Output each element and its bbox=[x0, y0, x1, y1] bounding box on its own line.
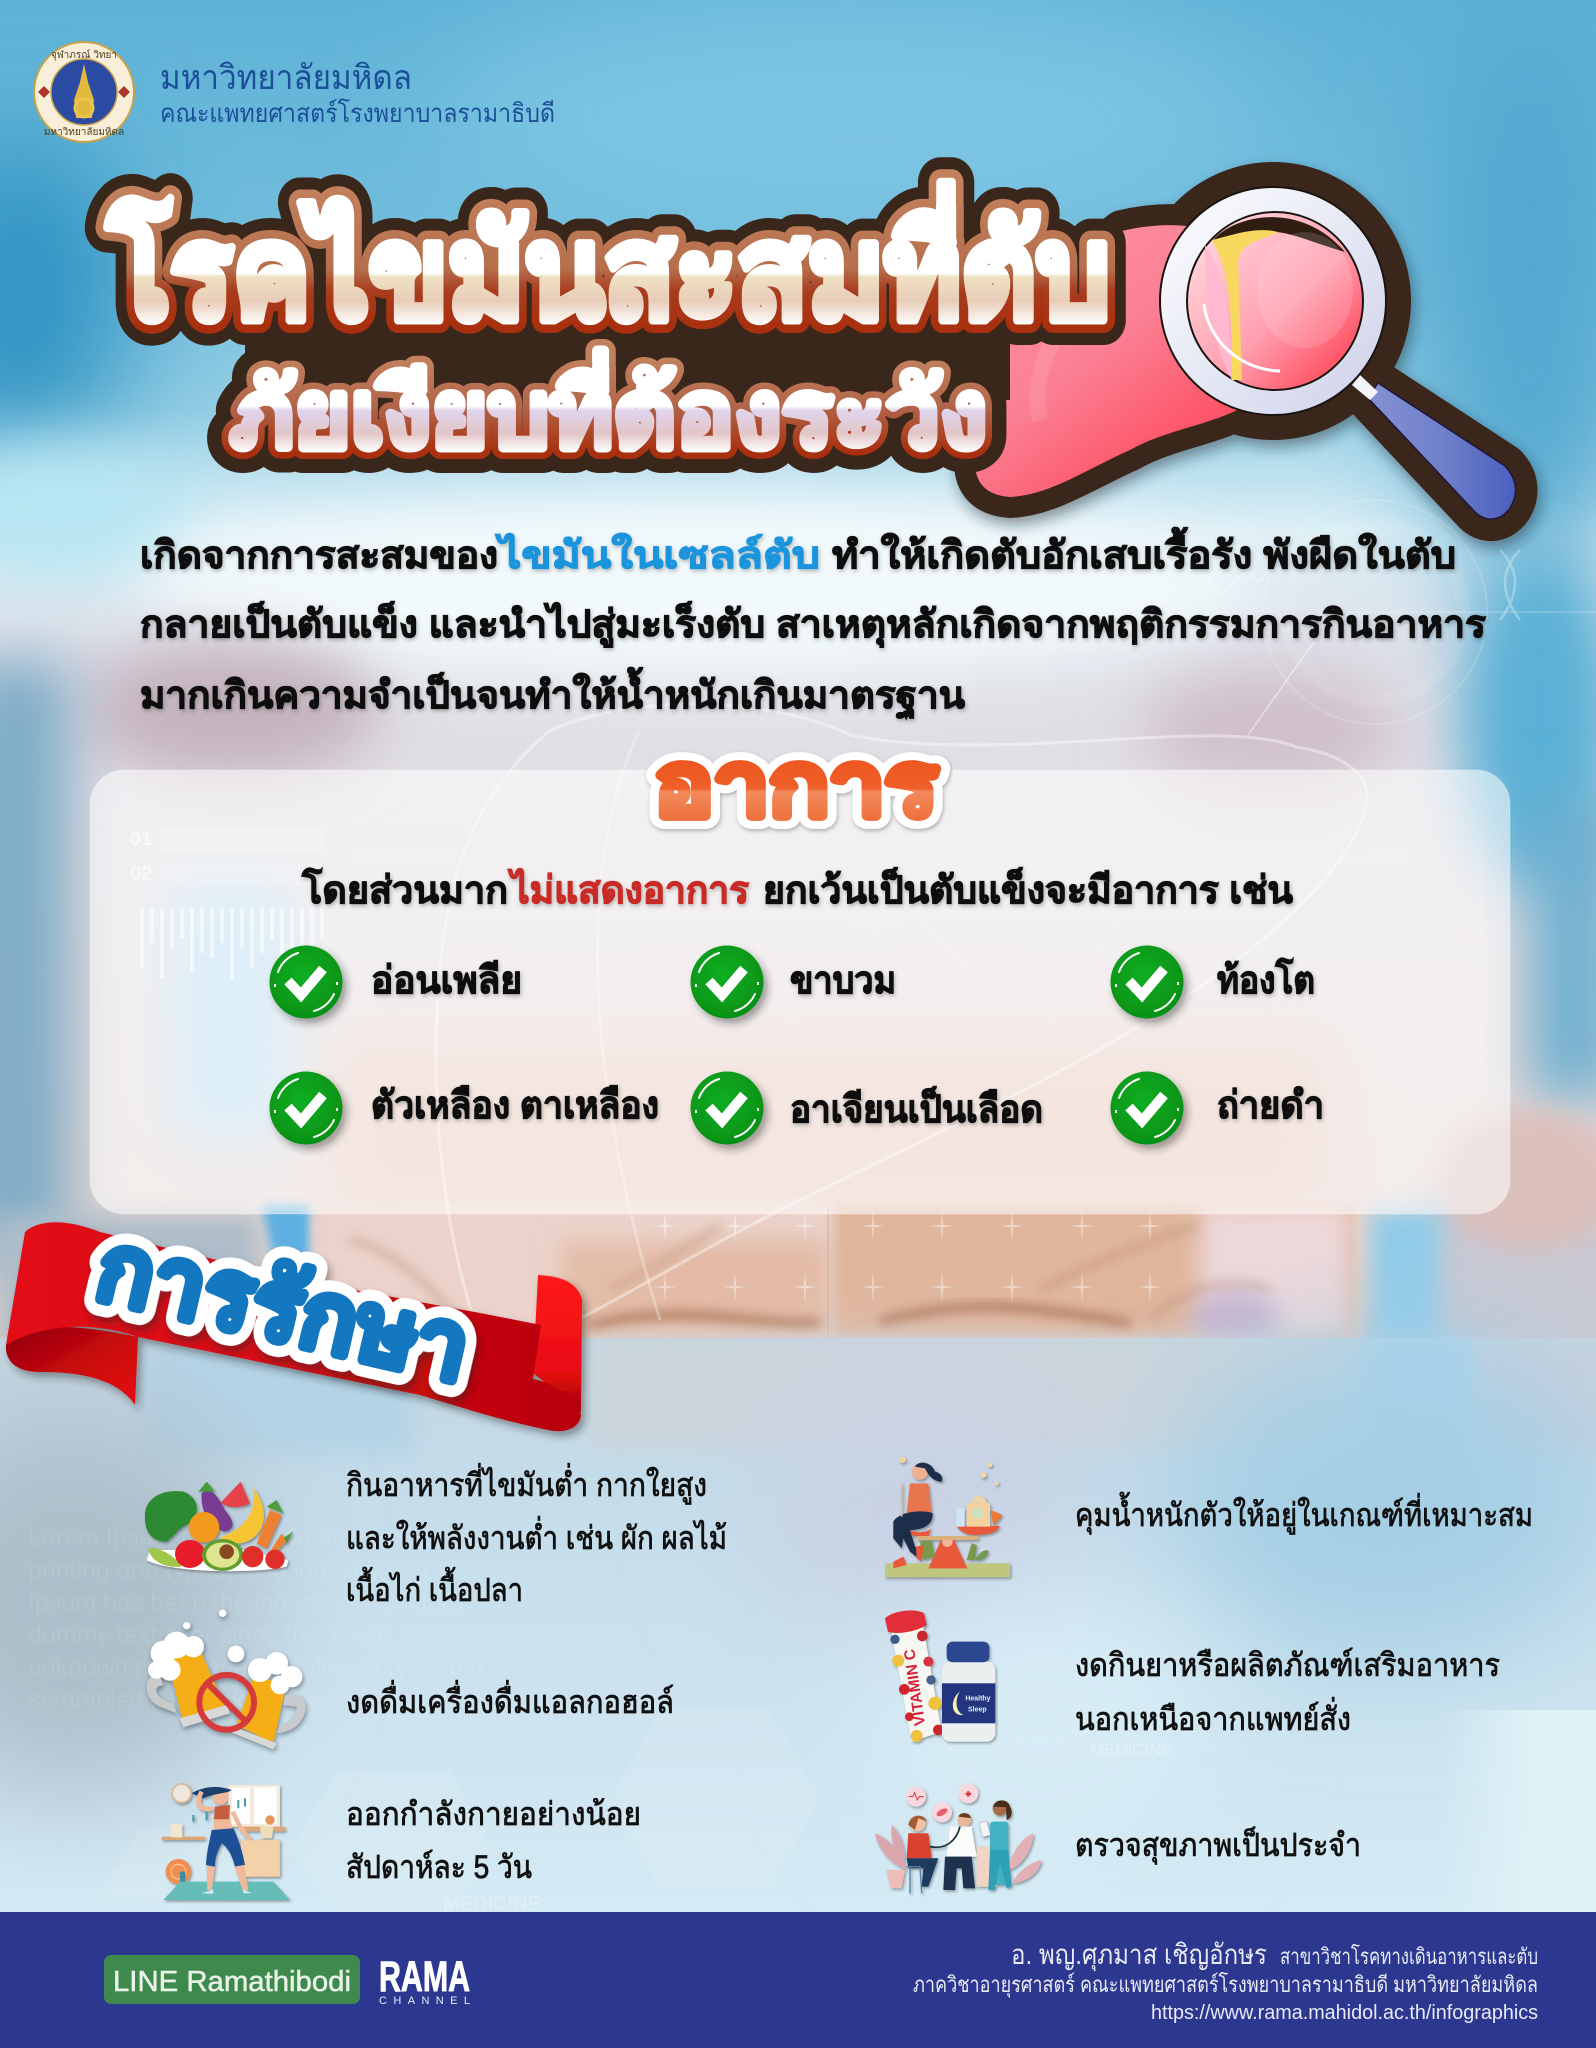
icon: supplements: Sleep bbox=[968, 1707, 987, 1714]
RAMA channel logo: RAMA bbox=[379, 1953, 470, 2001]
intro paragraph bbox=[140, 527, 1487, 720]
intro paragraph: มากเกินความจำเป็นจนทำให้น้ำหนักเกินมาตรฐาน bbox=[140, 667, 965, 720]
treatment text: left column: และให้พลังงานต่ำ เช่น ผัก ผลไม้ bbox=[346, 1516, 727, 1556]
skin bbox=[315, 1205, 830, 1340]
icon: fruit and vegetables bbox=[145, 1482, 293, 1571]
main title bbox=[106, 182, 1110, 467]
treatment text: left column: งดดื่มเครื่องดื่มแอลกอฮอล์ bbox=[346, 1680, 674, 1720]
faint decorative liver outline bbox=[436, 500, 1596, 1361]
symptom: leg swelling bbox=[690, 946, 896, 1018]
university logo bbox=[34, 42, 134, 142]
liver bbox=[975, 225, 1260, 497]
treatment text: left column bbox=[346, 1463, 727, 1885]
symptom: vomiting blood bbox=[690, 1072, 1043, 1144]
left coat bbox=[0, 1214, 260, 1344]
decorative data chart: 02 bbox=[130, 863, 152, 885]
icon: doctor checkup bbox=[875, 1783, 1042, 1893]
decorative data chart: 01 bbox=[130, 828, 152, 850]
right side hand and coat bbox=[1420, 1190, 1596, 1350]
sparkles bbox=[653, 1210, 1162, 1303]
symptom: swollen belly: ท้องโต bbox=[1217, 957, 1315, 1002]
symptoms subtitle: ยกเว้นเป็นตับแข็งจะมีอาการ เช่น bbox=[763, 867, 1293, 912]
treatment text: right column: นอกเหนือจากแพทย์สั่ง bbox=[1075, 1697, 1351, 1737]
credits: อ. พญ.ศุภมาส เชิญอักษร bbox=[1011, 1939, 1267, 1972]
liver and magnifier illustration bbox=[975, 187, 1515, 519]
symptom: fatigue bbox=[270, 946, 522, 1018]
background: printing and typesetting industry of the bbox=[28, 1556, 450, 1584]
symptom: black stool: ถ่ายดำ bbox=[1217, 1085, 1324, 1127]
icon: no alcohol bbox=[147, 1610, 306, 1749]
heading: symptoms: อาการ bbox=[654, 735, 938, 834]
symptoms subtitle bbox=[301, 867, 1293, 912]
main title: โรคไขมันสะสมที่ตับ bbox=[106, 182, 1110, 346]
icon: exercise bbox=[162, 1784, 290, 1900]
LINE badge bbox=[104, 1955, 360, 2004]
symptom: jaundice bbox=[270, 1072, 659, 1144]
intro paragraph: ไขมันในเซลล์ตับ bbox=[494, 533, 820, 577]
main title: ภัยเงียบที่ต้องระวัง bbox=[230, 348, 987, 467]
treatment text: right column bbox=[1075, 1492, 1533, 1865]
credits: https://www.rama.mahidol.ac.th/infographics bbox=[1151, 2002, 1538, 2024]
treatment text: right column: งดกินยาหรือผลิตภัณฑ์เสริมอาหาร bbox=[1075, 1647, 1500, 1683]
main title: ภัยเงียบที่ต้องระวัง bbox=[230, 348, 987, 467]
RAMA channel logo: CHANNEL bbox=[379, 1995, 470, 2007]
symptoms subtitle: โดยส่วนมาก bbox=[301, 867, 508, 912]
icon: supplements bbox=[885, 1611, 995, 1742]
university name bbox=[160, 59, 555, 128]
treatment text: left column: สัปดาห์ละ 5 วัน bbox=[346, 1849, 532, 1885]
symptoms subtitle: ไม่แสดงอาการ bbox=[507, 868, 750, 912]
magnifier lens bbox=[1160, 187, 1386, 415]
main title: โรคไขมันสะสมที่ตับ bbox=[106, 182, 1110, 346]
panel: symptoms bbox=[90, 735, 1510, 1214]
background: Lorem Ipsum is simply dummy text bbox=[28, 1523, 413, 1551]
symptom: fatigue: อ่อนเพลีย bbox=[371, 960, 522, 1002]
background: Ipsum has been the industry's standard bbox=[28, 1589, 464, 1617]
university name: คณะแพทยศาสตร์โรงพยาบาลรามาธิบดี bbox=[160, 98, 555, 128]
symptom: swollen belly bbox=[1110, 946, 1315, 1018]
treatment text: right column: ตรวจสุขภาพเป็นประจำ bbox=[1075, 1826, 1361, 1865]
intro paragraph: ทำให้เกิดตับอักเสบเรื้อรัง พังผืดในตับ bbox=[832, 527, 1456, 577]
treatment text: left column: เนื้อไก่ เนื้อปลา bbox=[346, 1567, 523, 1608]
decorative data chart bbox=[130, 828, 325, 980]
treatment text: left column: กินอาหารที่ไขมันต่ำ กากใยสูง bbox=[346, 1463, 707, 1505]
university name: มหาวิทยาลัยมหิดล bbox=[160, 59, 412, 97]
symptom: vomiting blood: อาเจียนเป็นเลือด bbox=[790, 1086, 1043, 1131]
background: scrambled it to make a type specimen bbox=[28, 1686, 448, 1714]
LINE badge: LINE Ramathibodi bbox=[113, 1966, 351, 1998]
dark sticker outline bbox=[975, 187, 1515, 519]
main title: โรคไขมันสะสมที่ตับ bbox=[106, 182, 1110, 346]
credits bbox=[913, 1939, 1538, 2024]
treatment text: right column: คุมน้ำหนักตัวให้อยู่ในเกณฑ์ที่เหมาะสม bbox=[1075, 1492, 1533, 1535]
symptom: leg swelling: ขาบวม bbox=[790, 960, 896, 1002]
heading: symptoms: อาการ bbox=[654, 735, 938, 834]
icon: weight control bbox=[885, 1457, 1010, 1577]
footer bbox=[0, 1912, 1596, 2048]
symptom: jaundice: ตัวเหลือง ตาเหลือง bbox=[371, 1085, 659, 1127]
RAMA channel logo bbox=[379, 1953, 470, 2007]
icon: supplements: VITAMIN C bbox=[901, 1648, 929, 1727]
university logo: มหาวิทยาลัยมหิดล bbox=[44, 127, 124, 138]
heading: treatment: การรักษา bbox=[87, 1213, 480, 1402]
treatment backdrop bbox=[0, 1338, 1596, 1914]
background: dummy text ever since the 1500s, when an bbox=[28, 1621, 503, 1649]
icon: supplements: Healthy bbox=[965, 1696, 991, 1703]
treatment ribbon bbox=[6, 1222, 582, 1431]
heading: treatment: การรักษา bbox=[87, 1213, 480, 1402]
treatment text: left column: ออกกำลังกายอย่างน้อย bbox=[346, 1796, 641, 1832]
intro paragraph: กลายเป็นตับแข็ง และนำไปสู่มะเร็งตับ สาเหตุหลักเกิดจากพฤติกรรมการกินอาหาร bbox=[140, 601, 1487, 648]
symptom: black stool bbox=[1110, 1072, 1324, 1144]
background: unknown printer took a galley of type and bbox=[28, 1654, 484, 1682]
intro paragraph: เกิดจากการสะสมของ bbox=[140, 535, 498, 577]
university logo: จุฬาภรณ์ วิทยา bbox=[51, 49, 117, 61]
background: MEDICINE bbox=[1090, 1740, 1173, 1759]
background: MEDICINE bbox=[443, 1893, 541, 1915]
magnifier handle bbox=[1368, 383, 1515, 519]
main title: ภัยเงียบที่ต้องระวัง bbox=[230, 348, 987, 467]
